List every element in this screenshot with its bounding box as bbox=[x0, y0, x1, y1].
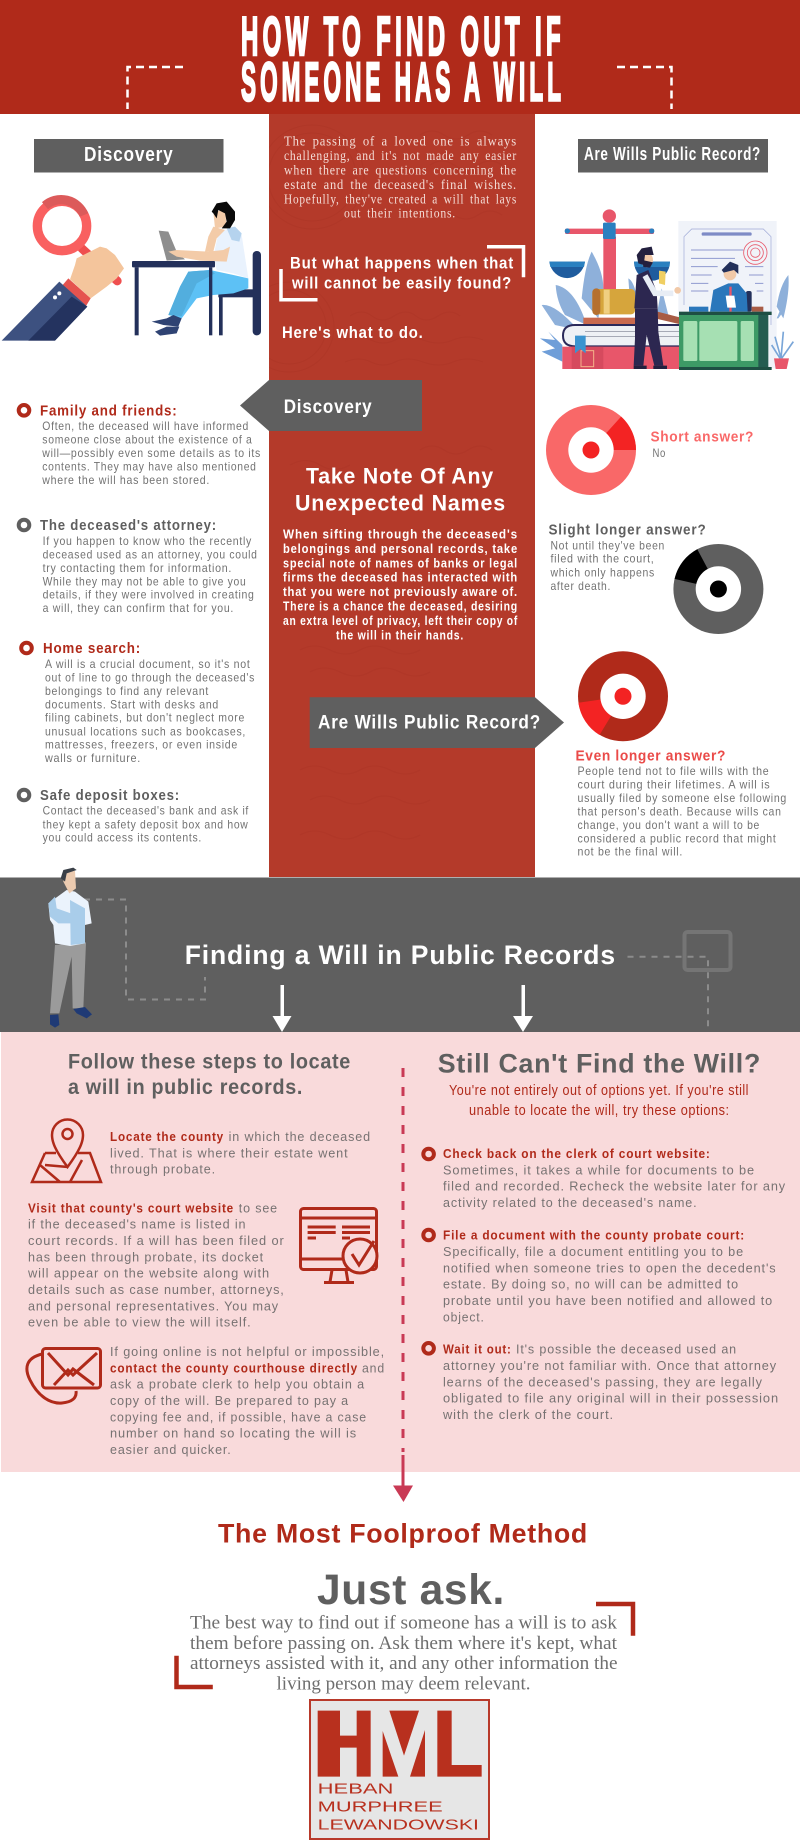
step: contact the courthouse: copying fee and, if possible, have a case bbox=[110, 1409, 367, 1424]
option: wait it out: learns of the deceased's passing, they are legally bbox=[443, 1374, 763, 1389]
text: just ask paragraph: The best way to find out if someone has a will is to ask bbox=[190, 1614, 618, 1634]
intro paragraph: challenging, and it's not made any easier bbox=[284, 148, 517, 163]
step: contact the courthouse: copy of the will. Be prepared to pay a bbox=[110, 1393, 349, 1408]
heading: take note bbox=[295, 463, 506, 516]
option: file a document: object. bbox=[443, 1309, 485, 1324]
list item: family and friends: will—possibly even some details as to its bbox=[41, 446, 261, 460]
arrow: discovery bbox=[240, 380, 422, 431]
callout: but what happens: But what happens when that bbox=[290, 253, 514, 272]
heading: take note: Unexpected Names bbox=[295, 491, 506, 516]
text: just ask paragraph bbox=[190, 1614, 618, 1694]
text: just ask paragraph: living person may deem relevant. bbox=[276, 1674, 530, 1694]
step: visit court website: and personal representatives. You may bbox=[28, 1298, 279, 1313]
option: file a document: File a document with the county probate court: bbox=[443, 1228, 745, 1243]
text: unexpected names paragraph: the will in their hands. bbox=[336, 628, 464, 642]
band: finding a will in public records: Finding a Will in Public Records bbox=[185, 940, 616, 970]
intro paragraph: out their intentions. bbox=[344, 206, 456, 221]
text: short answer: Short answer? bbox=[650, 429, 754, 446]
list item: safe deposit boxes: Contact the deceased's bank and ask if bbox=[43, 804, 249, 818]
arrow: right down bbox=[513, 985, 533, 1032]
list item: home search: out of line to go through the deceased's bbox=[45, 671, 255, 685]
option: wait it out: Wait it out: bbox=[443, 1342, 512, 1357]
logo: Heban Murphree Lewandowski bbox=[310, 1700, 489, 1839]
logo: Heban Murphree Lewandowski: MURPHREE bbox=[318, 1799, 443, 1816]
step: contact the courthouse: ask a probate clerk to help you obtain a bbox=[110, 1377, 365, 1392]
list item: the deceased's attorney: try contacting them for information. bbox=[43, 561, 232, 575]
step: contact the courthouse bbox=[110, 1344, 385, 1457]
option: check back on clerk website: Sometimes, it takes a while for documents to be bbox=[443, 1162, 755, 1177]
text: slight longer answer: filed with the court, bbox=[550, 552, 654, 566]
are wills public record heading bbox=[578, 139, 768, 172]
step: visit court website: has been through probate, its docket bbox=[28, 1249, 264, 1264]
illustration: woman at laptop bbox=[132, 202, 261, 336]
list item: family and friends: Family and friends: bbox=[40, 402, 178, 419]
arrow: are wills public record: Are Wills Public Record? bbox=[318, 711, 541, 733]
text: unexpected names paragraph: special note of names of banks or legal bbox=[283, 556, 518, 570]
discovery heading: Discovery bbox=[84, 144, 174, 166]
arrow: discovery: Discovery bbox=[284, 396, 372, 418]
text: unexpected names paragraph: belongings and personal records, take bbox=[283, 542, 518, 556]
chart: even longer answer donut bbox=[578, 651, 668, 741]
heading: still can't find the will: unable to locate the will, try these options: bbox=[469, 1103, 730, 1119]
step: locate the county bbox=[110, 1129, 371, 1177]
step: contact the courthouse: If going online is not helpful or impossible, bbox=[110, 1344, 385, 1359]
option: wait it out: attorney you're not familiar with. Once that attorney bbox=[443, 1358, 777, 1373]
option: check back on clerk website bbox=[423, 1146, 786, 1210]
text: unexpected names paragraph: an extra level of privacy, left their copy of bbox=[283, 614, 518, 628]
text: slight longer answer: Not until they've been bbox=[550, 538, 665, 552]
text: even longer answer bbox=[576, 747, 787, 859]
option: wait it out: obligated to file any original will in their possession bbox=[443, 1391, 779, 1406]
arrow: are wills public record bbox=[310, 697, 564, 748]
chart: slight longer answer donut bbox=[673, 544, 763, 634]
step: visit court website: if the deceased's name is listed in bbox=[28, 1217, 246, 1232]
list item: the deceased's attorney: a will, they can confirm that for you. bbox=[43, 601, 234, 615]
heading: follow these steps: Follow these steps to locate bbox=[68, 1050, 351, 1073]
icon: map pin bbox=[32, 1120, 101, 1182]
callout brackets bbox=[176, 1604, 633, 1687]
text: even longer answer: change, you don't want a will to be bbox=[578, 818, 760, 832]
callout: but what happens: will cannot be easily found? bbox=[291, 274, 512, 293]
text: here's what to do: Here's what to do. bbox=[282, 323, 424, 342]
icon: phone and envelope bbox=[27, 1348, 101, 1403]
intro paragraph: estate and the deceased's final wishes. bbox=[284, 177, 517, 192]
option: wait it out bbox=[423, 1342, 779, 1422]
option: file a document: estate. By doing so, no will can be admitted to bbox=[443, 1277, 739, 1292]
step: locate the county: in which the deceased bbox=[229, 1129, 371, 1144]
option: file a document: Specifically, file a document entitling you to be bbox=[443, 1244, 744, 1259]
text: slight longer answer: which only happens bbox=[550, 565, 655, 579]
list item: home search bbox=[21, 640, 255, 765]
text: even longer answer: considered a public record that might bbox=[578, 831, 776, 845]
heading: just ask: Just ask. bbox=[317, 1566, 505, 1614]
illustration: courtroom scene bbox=[540, 209, 793, 370]
list item: home search: Home search: bbox=[43, 640, 141, 657]
list item: home search: filing cabinets, but don't neglect more bbox=[45, 711, 245, 725]
list item: safe deposit boxes: they kept a safety deposit box and how bbox=[43, 817, 248, 831]
step: visit court website: even be able to view the will itself. bbox=[28, 1315, 252, 1330]
step: contact the courthouse: number on hand so locating the will is bbox=[110, 1426, 357, 1441]
step: visit court website: Visit that county's court website bbox=[28, 1200, 234, 1215]
list item: the deceased's attorney bbox=[19, 517, 258, 615]
text: unexpected names paragraph: that you were not previously aware of. bbox=[283, 585, 518, 599]
text: unexpected names paragraph: There is a chance the deceased, desiring bbox=[283, 599, 518, 613]
step: visit court website: details such as case number, attorneys, bbox=[28, 1282, 285, 1297]
panel: pink details bbox=[1, 1032, 800, 1472]
discovery heading bbox=[34, 139, 224, 172]
intro paragraph bbox=[284, 134, 517, 221]
list item: safe deposit boxes bbox=[19, 787, 249, 845]
option: check back on clerk website: Check back on the clerk of court website: bbox=[443, 1146, 711, 1161]
logo: Heban Murphree Lewandowski: LEWANDOWSKI bbox=[318, 1816, 479, 1833]
list item: the deceased's attorney: The deceased's attorney: bbox=[40, 517, 217, 534]
callout: but what happens bbox=[281, 247, 524, 300]
option: check back on clerk website: filed and recorded. Recheck the website later for any bbox=[443, 1179, 786, 1194]
heading: follow these steps bbox=[68, 1050, 351, 1099]
step: locate the county: through probate. bbox=[110, 1162, 216, 1177]
text: even longer answer: court during their lifetimes. A will is bbox=[578, 778, 770, 792]
chart: short answer donut bbox=[546, 405, 636, 495]
list item: home search: A will is a crucial document, so it's not bbox=[45, 657, 250, 671]
text: slight longer answer: Slight longer answer? bbox=[548, 522, 706, 539]
heading: the most foolproof method: The Most Foolproof Method bbox=[218, 1519, 588, 1549]
list item: family and friends bbox=[19, 402, 261, 487]
list item: home search: unusual locations such as bookcases, bbox=[45, 724, 246, 738]
list item: family and friends: where the will has been stored. bbox=[41, 473, 210, 487]
list item: family and friends: Often, the deceased will have informed bbox=[42, 419, 249, 433]
step: visit court website: to see bbox=[239, 1200, 278, 1215]
option: file a document bbox=[423, 1228, 776, 1324]
step: locate the county: lived. That is where their estate went bbox=[110, 1145, 348, 1160]
header banner bbox=[0, 0, 800, 114]
heading: still can't find the will: Still Can't Find the Will? bbox=[438, 1049, 761, 1079]
text: just ask paragraph: attorneys assisted with it, and any other information the bbox=[190, 1654, 618, 1674]
option: file a document: probate until you have been notified and allowed to bbox=[443, 1293, 773, 1308]
step: contact the courthouse: contact the county courthouse directly bbox=[110, 1360, 358, 1375]
intro paragraph: Hopefully, they've created a will that lays bbox=[284, 191, 517, 206]
illustration: standing man bbox=[48, 868, 92, 1028]
step: contact the courthouse: easier and quicker. bbox=[110, 1442, 232, 1457]
text: unexpected names paragraph: When sifting through the deceased's bbox=[283, 528, 518, 542]
text: just ask paragraph: them before passing on. Ask them where it's kept, what bbox=[190, 1634, 618, 1654]
arrow: to foolproof method bbox=[393, 1455, 413, 1502]
heading: take note: Take Note Of Any bbox=[306, 463, 494, 488]
list item: home search: belongings to find any relevant bbox=[45, 684, 209, 698]
list item: the deceased's attorney: While they may not be able to give you bbox=[43, 574, 246, 588]
list item: the deceased's attorney: deceased used as an attorney, you could bbox=[43, 547, 258, 561]
text: unexpected names paragraph: firms the deceased has interacted with bbox=[283, 571, 518, 585]
text: short answer: No bbox=[652, 446, 666, 460]
intro paragraph: when there are questions concerning the bbox=[284, 163, 517, 178]
heading: follow these steps: a will in public records. bbox=[68, 1076, 303, 1099]
heading: still can't find the will: You're not entirely out of options yet. If you're still bbox=[449, 1083, 749, 1099]
list item: home search: mattresses, freezers, or even inside bbox=[45, 738, 238, 752]
title bbox=[241, 5, 565, 112]
option: file a document: notified when someone tries to open the decedent's bbox=[443, 1260, 776, 1275]
option: check back on clerk website: activity related to the deceased's name. bbox=[443, 1195, 698, 1210]
intro paragraph: The passing of a loved one is always bbox=[284, 134, 517, 149]
text: slight longer answer bbox=[548, 522, 706, 593]
step: visit court website: will appear on the website along with bbox=[27, 1266, 270, 1281]
heading: still can't find the will bbox=[438, 1049, 761, 1119]
text: slight longer answer: after death. bbox=[550, 579, 611, 593]
text: short answer bbox=[650, 429, 754, 460]
band: finding a will in public records bbox=[0, 878, 800, 1040]
icon: computer with check bbox=[300, 1208, 377, 1282]
list item: home search: documents. Start with desks and bbox=[45, 697, 219, 711]
illustration: hand with magnifying glass bbox=[2, 200, 124, 341]
list item: safe deposit boxes: you could access its contents. bbox=[43, 831, 202, 845]
step: visit court website: court records. If a will has been filed or bbox=[28, 1233, 285, 1248]
logo: Heban Murphree Lewandowski: HEBAN bbox=[318, 1781, 393, 1798]
step: contact the courthouse: and bbox=[362, 1360, 385, 1375]
text: unexpected names paragraph bbox=[283, 528, 518, 642]
text: even longer answer: Even longer answer? bbox=[576, 747, 726, 764]
panel: centre column bbox=[244, 114, 535, 877]
text: even longer answer: not be the final will. bbox=[578, 845, 683, 859]
list item: family and friends: contents. They may have also mentioned bbox=[42, 459, 257, 473]
option: wait it out: with the clerk of the court. bbox=[442, 1407, 614, 1422]
list item: family and friends: someone close about the existence of a bbox=[42, 433, 252, 447]
text: even longer answer: People tend not to file wills with the bbox=[578, 764, 769, 778]
option: wait it out: It's possible the deceased used an bbox=[516, 1342, 737, 1357]
list item: the deceased's attorney: If you happen to know who the recently bbox=[43, 534, 252, 548]
list item: safe deposit boxes: Safe deposit boxes: bbox=[40, 787, 180, 804]
list item: the deceased's attorney: details, if they were involved in creating bbox=[43, 588, 255, 602]
arrow: left down bbox=[272, 985, 292, 1032]
step: locate the county: Locate the county bbox=[110, 1129, 224, 1144]
list item: home search: walls or furniture. bbox=[44, 751, 141, 765]
step: visit court website bbox=[27, 1200, 285, 1330]
